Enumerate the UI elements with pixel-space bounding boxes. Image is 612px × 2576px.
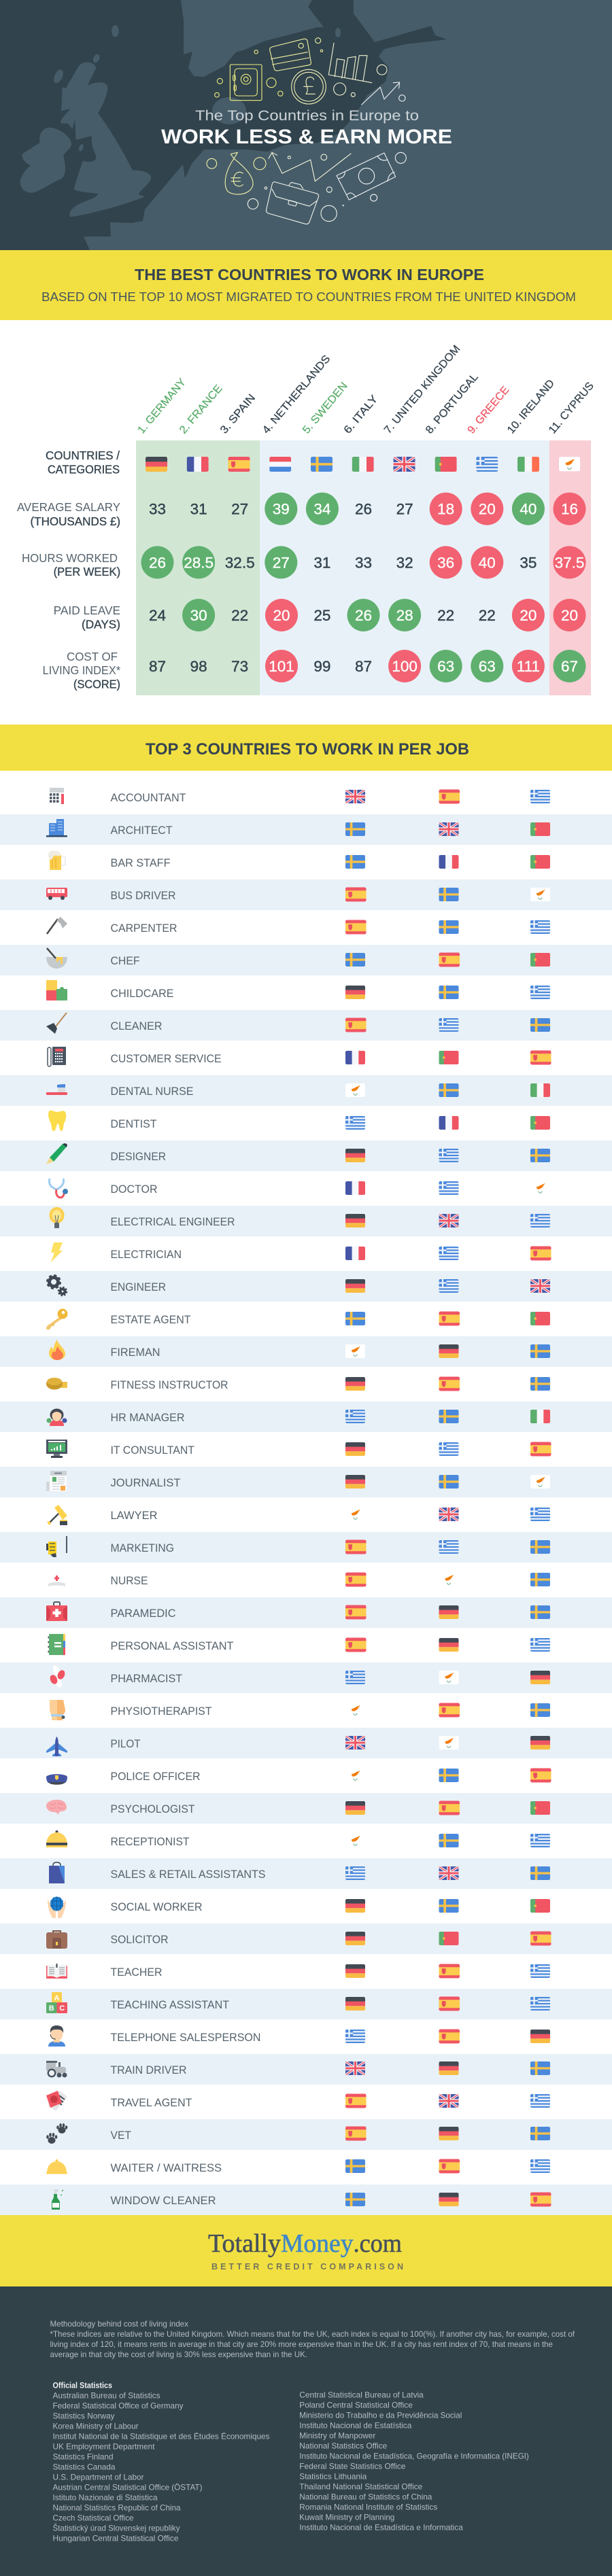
row: cost of living index: 63 xyxy=(479,658,496,675)
country flags row xyxy=(146,457,580,472)
panel: best countries heading xyxy=(0,250,612,320)
row: average salary: 18 xyxy=(437,501,454,518)
row: travel agent xyxy=(46,2091,550,2111)
row: window cleaner xyxy=(0,2185,612,2215)
icon: open book xyxy=(46,1964,67,1979)
row: fitness instructor xyxy=(46,1377,550,1391)
row: lawyer xyxy=(47,1505,550,1525)
icon: buildings xyxy=(46,819,67,837)
row: average salary: 27 xyxy=(231,501,248,518)
row: customer service xyxy=(48,1047,551,1066)
official statistics column 1: Štatistický úrad Slovenskej republiky xyxy=(53,2523,180,2533)
panel: brand footer xyxy=(0,2215,612,2286)
table background bands xyxy=(136,440,591,695)
official statistics column 2: Federal State Statistics Office xyxy=(299,2462,406,2471)
row: cost of living index: 100 xyxy=(392,658,418,675)
methodology note: *These indices are relative to the United Kingdom. Which means that for the UK, each index is equal to 100(%). If another city has, for example, cost of xyxy=(50,2329,575,2339)
row: teaching assistant xyxy=(0,1989,612,2019)
icon: bus xyxy=(46,888,67,900)
icon: measuring tape xyxy=(46,1378,67,1389)
icon: spray bottle xyxy=(52,2189,63,2210)
row: hours worked: 26 xyxy=(149,554,166,571)
panel: header xyxy=(0,0,612,250)
row: bus driver: BUS DRIVER xyxy=(110,889,175,902)
row: police officer xyxy=(46,1769,551,1785)
row: hours worked: 32.5 xyxy=(225,554,255,571)
row: journalist xyxy=(0,1467,612,1497)
logo xyxy=(208,2229,402,2258)
row: architect xyxy=(0,814,612,845)
row: fitness instructor: FITNESS INSTRUCTOR xyxy=(110,1378,228,1391)
icon: beer mug xyxy=(48,850,65,870)
rotated country names: 11. CYPRUS xyxy=(547,380,596,436)
row: cost of living index: 99 xyxy=(313,658,330,675)
row: pilot xyxy=(0,1728,612,1758)
row: average salary: 27 xyxy=(396,501,413,518)
icon: monitor xyxy=(46,1440,67,1458)
icon: light bulb xyxy=(49,1207,64,1228)
icon: flame xyxy=(49,1340,65,1360)
official statistics column 1: Hungarian Central Statistical Office xyxy=(53,2534,179,2543)
rotated country names: 7. UNITED KINGDOM xyxy=(382,343,462,436)
row: customer service: CUSTOMER SERVICE xyxy=(110,1052,222,1065)
methodology note: average in that city the cost of living is 30% less expensive than in the UK. xyxy=(50,2350,307,2359)
row: estate agent: ESTATE AGENT xyxy=(110,1313,190,1326)
row: hours worked: 36 xyxy=(437,554,454,571)
icon: brain xyxy=(46,1800,67,1815)
icon: person xyxy=(46,1408,67,1426)
official statistics column 1: Australian Bureau of Statistics xyxy=(53,2391,160,2401)
row: marketing xyxy=(0,1532,612,1563)
row: cost of living index: 67 xyxy=(561,658,578,675)
row: hours worked: 40 xyxy=(479,554,496,571)
row: hours worked: 31 xyxy=(313,554,330,571)
icon: gears xyxy=(48,1275,67,1295)
official statistics column 1: National Statistics Republic of China xyxy=(53,2503,181,2512)
icon: serving cloche xyxy=(46,2159,67,2174)
row: paramedic xyxy=(0,1597,612,1628)
row: sales and retail assistants xyxy=(0,1858,612,1889)
icon: safe xyxy=(215,50,283,101)
category labels xyxy=(17,449,120,691)
official statistics column 2: Kuwait Ministry of Planning xyxy=(299,2512,394,2522)
methodology note: living index of 120, it means rents in average in that city are 20% more expensive than in the UK. If a city has rent index of 70, that means in the xyxy=(50,2339,553,2349)
row: estate agent xyxy=(46,1309,550,1329)
row: hours worked: 35 xyxy=(520,554,537,571)
row: paid leave: 24 xyxy=(149,607,166,624)
icon: alphabet blocks xyxy=(46,1992,67,2013)
row: electrician xyxy=(51,1242,551,1262)
row: bar staff xyxy=(48,850,550,870)
row: carpenter: CARPENTER xyxy=(110,922,177,935)
logo: Money xyxy=(281,2229,354,2258)
icon: puzzle xyxy=(46,980,67,1000)
row: paid leave: 20 xyxy=(273,607,290,624)
category labels: COUNTRIES / xyxy=(46,449,120,462)
row: dental nurse: DENTAL NURSE xyxy=(110,1085,193,1098)
official statistics column 2: Central Statistical Bureau of Latvia xyxy=(299,2390,424,2399)
logo: Totally xyxy=(208,2229,281,2258)
row: cost of living index: 87 xyxy=(355,658,372,675)
title xyxy=(161,108,452,148)
row: sales and retail assistants: SALES & RETAIL ASSISTANTS xyxy=(110,1868,265,1881)
official statistics column 2: Instituto Nacional de Estatística xyxy=(299,2421,412,2431)
row: dentist: DENTIST xyxy=(110,1117,156,1130)
row: paid leave: 20 xyxy=(561,607,578,624)
row: architect: ARCHITECT xyxy=(110,824,173,837)
icon: euro money bag xyxy=(207,152,266,194)
row: vet xyxy=(0,2119,612,2150)
row: dentist xyxy=(48,1111,550,1131)
methodology note: Methodology behind cost of living index xyxy=(50,2319,188,2329)
row: physiotherapist: PHYSIOTHERAPIST xyxy=(110,1705,212,1718)
official statistics column 2: National Bureau of Statistics of China xyxy=(299,2492,432,2501)
category labels: LIVING INDEX* xyxy=(43,663,120,677)
icon: notebook xyxy=(48,1634,65,1655)
row: personal assistant xyxy=(48,1634,550,1655)
row: travel agent: TRAVEL AGENT xyxy=(110,2096,192,2109)
official statistics column 1: Istituto Nazionale di Statistica xyxy=(53,2493,158,2503)
row: social worker xyxy=(48,1896,550,1918)
row: cost of living index: 98 xyxy=(190,658,207,675)
row: lawyer: LAWYER xyxy=(110,1509,158,1522)
icon: stethoscope xyxy=(49,1179,67,1198)
rotated country names: 3. SPAIN xyxy=(218,392,258,436)
row: paid leave: 26 xyxy=(355,607,372,624)
row: hours worked: 32 xyxy=(396,554,413,571)
rotated country names: 9. GREECE xyxy=(466,385,511,436)
icon: alphabet blocks: A xyxy=(54,1994,60,2002)
row: cost of living index: 63 xyxy=(437,658,454,675)
official statistics column 2: National Statistics Office xyxy=(299,2441,388,2451)
rotated country names xyxy=(136,343,596,436)
row: doctor xyxy=(49,1179,550,1198)
row: teacher: TEACHER xyxy=(110,1966,162,1979)
row: vet: VET xyxy=(110,2129,131,2142)
category labels: (SCORE) xyxy=(73,677,120,691)
row: waiter or waitress: WAITER / WAITRESS xyxy=(110,2161,222,2174)
row: solicitor xyxy=(0,1924,612,1954)
category labels: CATEGORIES xyxy=(48,462,120,476)
icon: paw prints xyxy=(46,2123,67,2144)
row: hours worked: 27 xyxy=(273,554,290,571)
row: telephone salesperson xyxy=(48,2025,550,2047)
row: it consultant xyxy=(46,1440,551,1458)
official statistics column 1: Statistics Canada xyxy=(53,2462,116,2471)
row: fireman: FIREMAN xyxy=(110,1346,160,1359)
row: cost of living index: 111 xyxy=(517,658,540,675)
official statistics column 2: Ministry of Manpower xyxy=(299,2431,375,2440)
category labels: (PER WEEK) xyxy=(54,565,120,578)
row: paid leave: 22 xyxy=(231,607,248,624)
icon: alphabet blocks: C xyxy=(59,2004,65,2013)
official statistics column 2 xyxy=(299,2390,529,2533)
row: cost of living index: 101 xyxy=(269,658,294,675)
icon: hands and globe xyxy=(48,1896,66,1918)
logo: .com xyxy=(354,2229,402,2258)
row: accountant: ACCOUNTANT xyxy=(110,791,186,804)
category labels: (THOUSANDS £) xyxy=(30,515,120,528)
rotated country names: 4. NETHERLANDS xyxy=(260,353,333,436)
icon: key xyxy=(46,1309,68,1329)
row: social worker: SOCIAL WORKER xyxy=(110,1900,203,1913)
icon: wrist support xyxy=(50,1700,65,1720)
official statistics column 1 xyxy=(53,2380,269,2543)
official statistics column 1: Federal Statistical Office of Germany xyxy=(53,2401,184,2410)
row: childcare: CHILDCARE xyxy=(110,987,174,1000)
icon: police cap xyxy=(46,1774,67,1785)
row: pharmacist: PHARMACIST xyxy=(110,1672,182,1685)
row: designer: DESIGNER xyxy=(110,1150,166,1163)
row: hours worked: 37.5 xyxy=(555,554,584,571)
icon: alphabet blocks: B xyxy=(49,2004,54,2013)
panel: top 3 heading xyxy=(0,725,612,771)
row: carpenter xyxy=(47,917,550,935)
row: electrician: ELECTRICIAN xyxy=(110,1248,182,1261)
icon: leather bag xyxy=(46,1931,67,1949)
row: psychologist xyxy=(0,1793,612,1824)
row: cleaner: CLEANER xyxy=(110,1020,162,1032)
icon: megaphone xyxy=(46,1536,67,1557)
row: paid leave: 22 xyxy=(437,607,454,624)
icon: calculator xyxy=(50,788,64,804)
row: receptionist: RECEPTIONIST xyxy=(110,1835,189,1848)
official statistics column 1: Czech Statistical Office xyxy=(53,2513,134,2523)
row: designer xyxy=(0,1141,612,1171)
row: paid leave: 30 xyxy=(190,607,207,624)
title: WORK LESS & EARN MORE xyxy=(161,126,452,148)
row: average salary xyxy=(149,493,586,525)
row: bus driver xyxy=(0,880,612,910)
icon: tooth xyxy=(48,1111,66,1131)
official statistics column 2: Thailand National Statistical Office xyxy=(299,2482,423,2492)
official statistics column 2: Poland Central Statistical Office xyxy=(299,2401,413,2410)
row: waiter or waitress xyxy=(46,2159,550,2174)
row: average salary: 40 xyxy=(520,501,537,518)
category labels: HOURS WORKED xyxy=(22,551,118,565)
icon: credit card xyxy=(270,38,323,71)
row: hr manager xyxy=(0,1402,612,1432)
row: teaching assistant: TEACHING ASSISTANT xyxy=(110,1998,229,2011)
methodology note xyxy=(50,2319,575,2359)
row: paramedic: PARAMEDIC xyxy=(110,1607,175,1620)
icon: toothbrush xyxy=(46,1084,67,1095)
official statistics column 1: UK Employment Department xyxy=(53,2441,155,2451)
row: nurse xyxy=(48,1573,550,1587)
official statistics column 1: Institut National de la Statistique et des Études Économiques xyxy=(53,2431,269,2441)
row: paid leave: 20 xyxy=(520,607,537,624)
official statistics column 1: Statistics Finland xyxy=(53,2452,113,2462)
row: police officer: POLICE OFFICER xyxy=(110,1770,200,1783)
icon: briefcase xyxy=(248,182,343,224)
row: paid leave: 25 xyxy=(313,607,330,624)
row: engineer xyxy=(0,1271,612,1302)
row: personal assistant: PERSONAL ASSISTANT xyxy=(110,1639,234,1652)
row: hours worked: 28.5 xyxy=(184,554,214,571)
icon: newspaper xyxy=(46,1471,67,1491)
icon: gavel xyxy=(47,1505,67,1525)
row: electrical engineer xyxy=(0,1206,612,1236)
row: marketing: MARKETING xyxy=(110,1542,174,1554)
rotated country names: 8. PORTUGAL xyxy=(424,371,481,436)
icon: axe xyxy=(47,917,67,934)
icon: mixing bowl xyxy=(46,948,67,969)
icon: steam train xyxy=(46,2061,67,2077)
row: window cleaner: WINDOW CLEANER xyxy=(110,2194,216,2207)
row: fireman xyxy=(0,1336,612,1367)
row: average salary: 20 xyxy=(479,501,496,518)
row: psychologist: PSYCHOLOGIST xyxy=(110,1803,194,1815)
icon: bar chart xyxy=(328,43,387,97)
panel: methodology and sources xyxy=(0,2286,612,2576)
row: average salary: 39 xyxy=(273,501,290,518)
official statistics column 2: Ministerio do Trabalho e da Previdência Social xyxy=(299,2410,462,2420)
illustration: finance line icons xyxy=(207,38,406,224)
icon: broom xyxy=(46,1013,67,1034)
row: journalist: JOURNALIST xyxy=(110,1476,181,1489)
rotated country names: 5. SWEDEN xyxy=(301,380,350,436)
row: cleaner xyxy=(0,1010,612,1041)
row: hr manager: HR MANAGER xyxy=(110,1411,185,1424)
row: teacher xyxy=(46,1964,550,1979)
icon: passport and tickets xyxy=(46,2091,67,2111)
panel: best countries heading: THE BEST COUNTRIES TO WORK IN EUROPE xyxy=(135,266,484,283)
row: physiotherapist xyxy=(50,1700,550,1720)
icon: pills xyxy=(49,1665,66,1688)
title: The Top Countries in Europe to xyxy=(195,108,419,124)
row: electrical engineer: ELECTRICAL ENGINEER xyxy=(110,1215,235,1228)
panel: jobs list xyxy=(0,788,612,2215)
official statistics column 1: Statistics Norway xyxy=(53,2412,114,2421)
icon: nurse cap xyxy=(48,1576,65,1586)
row: dental nurse xyxy=(0,1075,612,1106)
official statistics column 2: Romania National Institute of Statistics xyxy=(299,2503,437,2512)
row: chef: CHEF xyxy=(110,954,140,967)
category labels: PAID LEAVE xyxy=(54,604,120,617)
row: nurse: NURSE xyxy=(110,1574,148,1587)
row: doctor: DOCTOR xyxy=(110,1183,158,1196)
row: average salary: 34 xyxy=(313,501,330,518)
icon: rising arrow xyxy=(362,82,405,105)
icon: reception bell xyxy=(46,1830,67,1847)
icon: plane xyxy=(46,1737,67,1756)
icon: pound coin xyxy=(292,69,326,104)
row: cost of living index: 87 xyxy=(149,658,166,675)
row: train driver: TRAIN DRIVER xyxy=(110,2064,186,2076)
category labels: COST OF xyxy=(67,650,118,663)
row: train driver xyxy=(0,2054,612,2085)
icon: medical bag xyxy=(46,1602,67,1621)
row: cost of living index xyxy=(149,650,586,682)
row: pharmacist xyxy=(0,1663,612,1693)
row: childcare xyxy=(46,980,550,1000)
row: paid leave: 28 xyxy=(396,607,413,624)
official statistics column 1: U.S. Department of Labor xyxy=(53,2473,144,2482)
icon: banknote xyxy=(337,152,406,201)
icon: call agent xyxy=(48,2025,65,2047)
map of north-west Europe xyxy=(0,0,447,250)
official statistics column 2: Instituto Nacional de Estadística, Geografía e Informatica (INEGI) xyxy=(299,2451,529,2460)
official statistics column 1: Official Statistics xyxy=(53,2380,112,2390)
panel: country comparison table xyxy=(17,343,596,695)
icon: telephone xyxy=(48,1047,66,1066)
icon: shopping bag xyxy=(49,1862,65,1883)
panel: best countries heading: BASED ON THE TOP 10 MOST MIGRATED TO COUNTRIES FROM THE UNITED KINGDOM xyxy=(41,290,576,304)
rotated country names: 1. GERMANY xyxy=(136,377,188,436)
row: telephone salesperson: TELEPHONE SALESPERSON xyxy=(110,2031,261,2044)
rotated country names: 10. IRELAND xyxy=(505,378,557,436)
row: average salary: 26 xyxy=(355,501,372,518)
row: pilot: PILOT xyxy=(110,1737,140,1750)
rotated country names: 2. FRANCE xyxy=(177,383,225,436)
row: hours worked: 33 xyxy=(355,554,372,571)
icon: lightning bolt xyxy=(51,1242,63,1262)
row: paid leave xyxy=(149,599,586,631)
row: paid leave: 22 xyxy=(479,607,496,624)
icon: pencil xyxy=(46,1143,67,1164)
icon: falling arrow xyxy=(269,152,351,181)
row: average salary: 33 xyxy=(149,501,166,518)
row: solicitor: SOLICITOR xyxy=(110,1933,169,1946)
row: average salary: 31 xyxy=(190,501,207,518)
row: it consultant: IT CONSULTANT xyxy=(110,1444,194,1457)
official statistics column 1: Korea Ministry of Labour xyxy=(53,2421,139,2431)
row: cost of living index: 73 xyxy=(231,658,248,675)
tagline: BETTER CREDIT COMPARISON xyxy=(211,2262,403,2272)
category labels: AVERAGE SALARY xyxy=(17,500,120,514)
official statistics column 1: Austrian Central Statistical Office (ÖSTAT) xyxy=(53,2482,203,2492)
official statistics column 2: Statistics Lithuania xyxy=(299,2471,367,2481)
row: receptionist xyxy=(46,1830,550,1848)
row: engineer: ENGINEER xyxy=(110,1281,166,1293)
row: bar staff: BAR STAFF xyxy=(110,856,170,869)
category labels: (DAYS) xyxy=(82,617,120,631)
row: average salary: 16 xyxy=(561,501,578,518)
row: chef xyxy=(0,945,612,975)
row: hours worked xyxy=(141,546,586,578)
panel: top 3 heading: TOP 3 COUNTRIES TO WORK IN PER JOB xyxy=(146,740,469,759)
row: accountant xyxy=(50,788,550,804)
official statistics column 2: Instituto Nacional de Estadística e Informatica xyxy=(299,2523,463,2533)
rotated country names: 6. ITALY xyxy=(342,393,381,436)
